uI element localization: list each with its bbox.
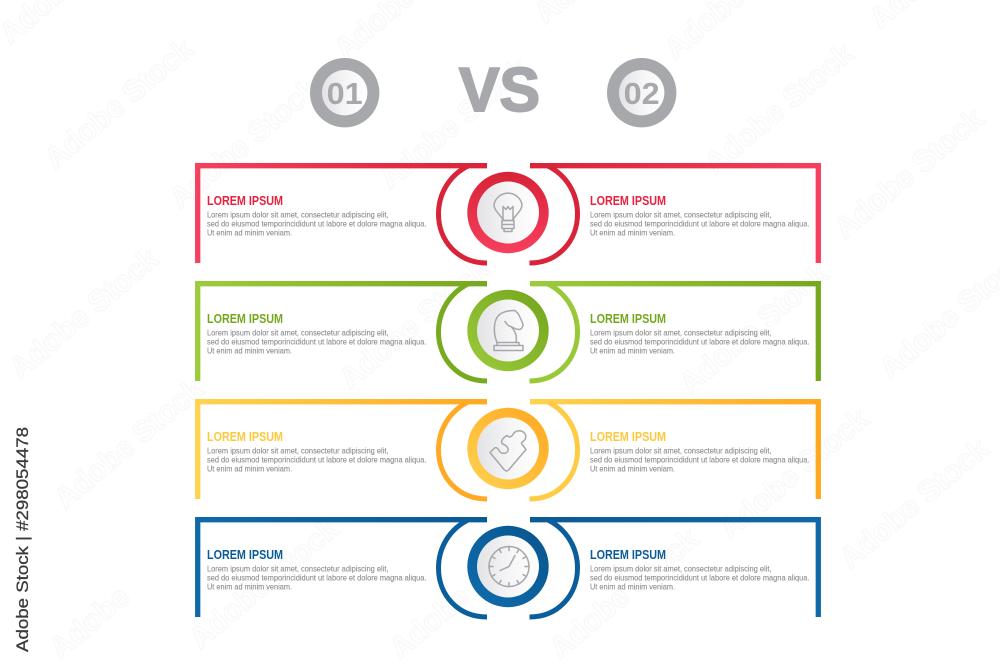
badge: 01 [310,58,379,127]
disc [477,418,539,480]
ring [467,172,549,253]
text: Adobe Stock [833,432,995,575]
right text block: Lorem ipsum dolor sit amet, consectetur adipiscing elit, [590,564,772,574]
right text block: LOREM IPSUM [590,312,666,326]
left text block: Ut enim ad minim veniam. [207,582,292,592]
right arc [530,166,578,263]
disc [477,300,539,362]
icon: light bulb [494,193,522,232]
left text block: sed do eiusmod temporincididunt ut labore et dolore magna aliqua. [207,336,426,346]
left text block: Lorem ipsum dolor sit amet, consectetur adipiscing elit, [207,564,388,574]
right text block [590,548,810,592]
right text block: LOREM IPSUM [590,194,666,208]
badge: 02 [607,58,676,127]
stock credit: Adobe Stock | #298054478 [13,427,32,652]
text: Adobe Stock [373,52,535,195]
left arc [438,166,487,263]
left arc [438,284,487,381]
row 1: red [198,166,818,263]
disc [477,182,539,244]
right text block: sed do eiusmod temporincididunt ut labore et dolore magna aliqua. [590,218,810,228]
right text block: Lorem ipsum dolor sit amet, consectetur adipiscing elit, [590,328,772,338]
text: Adobe Stock [698,37,860,180]
right text block: Ut enim ad minim veniam. [590,346,675,356]
left text block: LOREM IPSUM [207,548,283,562]
right text block: LOREM IPSUM [590,548,666,562]
icon: puzzle piece [490,431,526,471]
left text block: Lorem ipsum dolor sit amet, consectetur adipiscing elit, [207,210,388,220]
right text block [590,312,810,356]
left arc [438,402,487,499]
right text block: Lorem ipsum dolor sit amet, consectetur adipiscing elit, [590,446,772,456]
text: Adobe [383,580,476,665]
right text block [590,430,810,474]
left panel frame [198,166,487,263]
right arc [530,284,578,381]
right text block: sed do eiusmod temporincididunt ut labore et dolore magna aliqua. [590,336,810,346]
left text block [207,430,426,474]
left text block [207,194,426,238]
left arc [438,520,487,617]
left text block: Ut enim ad minim veniam. [207,346,292,356]
left text block: sed do eiusmod temporincididunt ut labore et dolore magna aliqua. [207,572,426,582]
text: Adobe [43,580,136,665]
left text block: LOREM IPSUM [207,430,283,444]
text: Adobe Stock [38,32,200,175]
text: Adobe Stock [163,72,325,215]
right text block: Ut enim ad minim veniam. [590,582,675,592]
right text block [590,194,810,238]
right panel frame [530,166,818,263]
right text block: Lorem ipsum dolor sit amet, consectetur adipiscing elit, [590,210,772,220]
left text block [207,312,426,356]
right text block: sed do eiusmod temporincididunt ut labore et dolore magna aliqua. [590,454,810,464]
text: Adobe Stock [673,257,835,400]
left text block: Lorem ipsum dolor sit amet, consectetur adipiscing elit, [207,446,388,456]
badge: 01: 01 [327,76,363,111]
right text block: LOREM IPSUM [590,430,666,444]
right text block: Ut enim ad minim veniam. [590,228,675,238]
left text block: Lorem ipsum dolor sit amet, consectetur adipiscing elit, [207,328,388,338]
right panel frame [530,402,818,499]
ring [467,290,549,371]
text: Adobe Stock [713,402,875,545]
ring [467,526,549,607]
left text block: Ut enim ad minim veniam. [207,228,292,238]
row 4: blue [198,520,818,617]
row 3: yellow [198,402,818,499]
left panel frame [198,520,487,617]
badge: 02: 02 [624,76,660,111]
row 2: green [198,284,818,381]
left text block: LOREM IPSUM [207,312,283,326]
text: Adobe Stock [828,102,990,245]
right arc [530,402,578,499]
left text block: sed do eiusmod temporincididunt ut labore et dolore magna aliqua. [207,454,426,464]
text: Adobe Stock [183,512,345,655]
ring [467,408,549,489]
left panel frame [198,402,487,499]
text: Adobe Stock [543,522,705,665]
icon: clock [489,546,529,586]
left text block [207,548,426,592]
heading: VS: VS [459,56,540,125]
left text block: LOREM IPSUM [207,194,283,208]
text: Adobe Stock [48,372,210,515]
right text block: sed do eiusmod temporincididunt ut labore et dolore magna aliqua. [590,572,810,582]
text: Adobe Stock [3,242,165,385]
right panel frame [530,520,818,617]
right text block: Ut enim ad minim veniam. [590,464,675,474]
left panel frame [198,284,487,381]
icon: chess knight [494,310,523,350]
disc [477,536,539,598]
right arc [530,520,578,617]
left text block: Ut enim ad minim veniam. [207,464,292,474]
left text block: sed do eiusmod temporincididunt ut labore et dolore magna aliqua. [207,218,426,228]
right panel frame [530,284,818,381]
text: Adobe Stock [333,252,495,395]
